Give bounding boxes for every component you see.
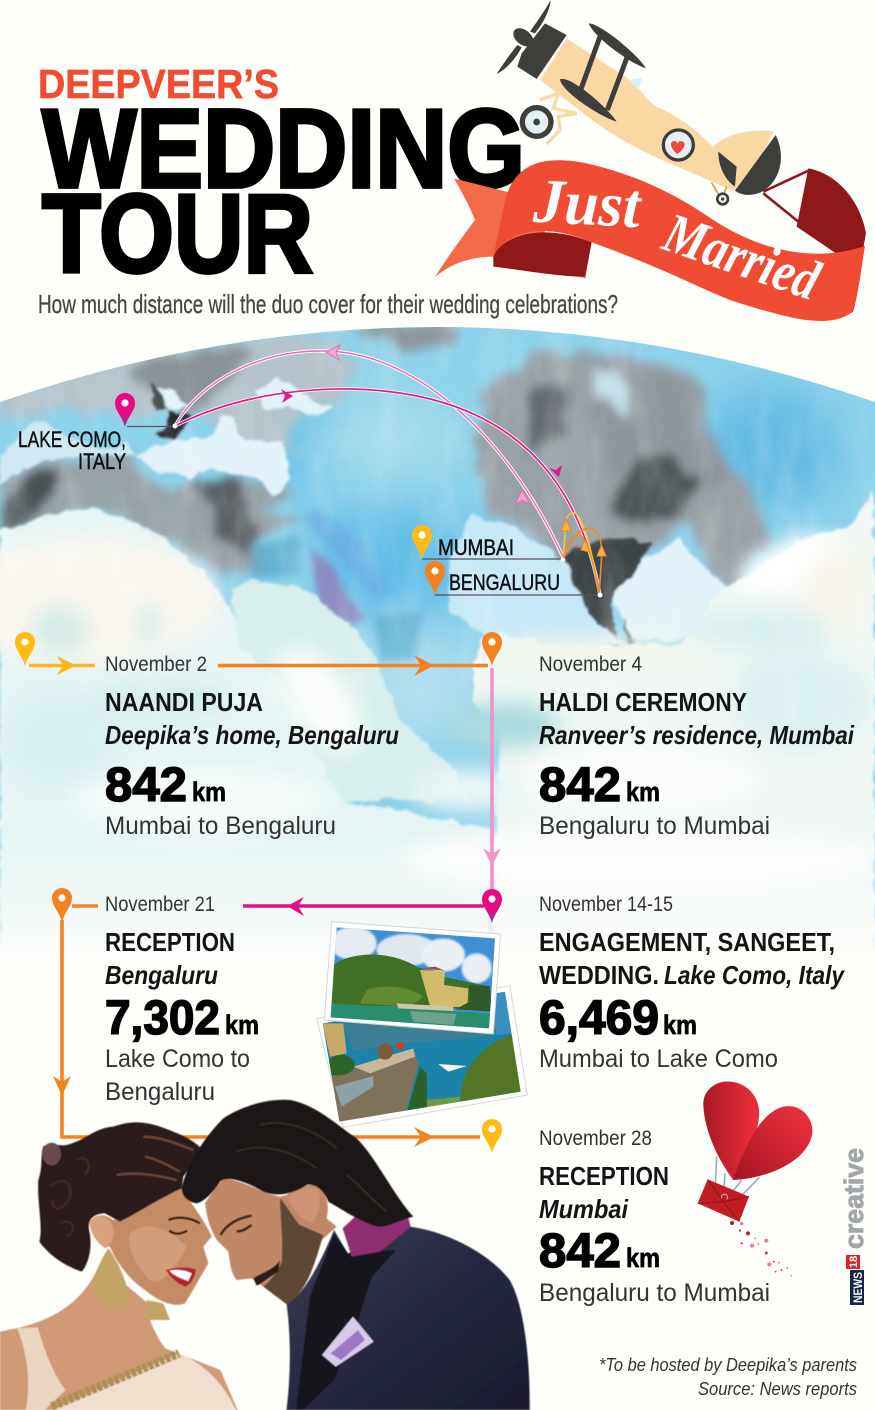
panel: Nov 28 Reception Mumbai: RECEPTION <box>539 1161 669 1191</box>
panel: Nov 28 Reception Mumbai: km <box>626 1243 660 1273</box>
dots <box>172 424 178 428</box>
photos: Lake Como <box>310 922 530 1127</box>
news box <box>850 1270 864 1305</box>
ear <box>287 1188 320 1223</box>
news text: NEWS <box>851 1272 865 1303</box>
panel: Nov 4 Haldi Ceremony <box>539 653 855 840</box>
panel: Nov 2 Naandi Puja <box>105 653 399 840</box>
illustration: biplane with Just Married banner <box>435 0 866 321</box>
panel: Nov 21 Reception Bengaluru: RECEPTION <box>105 927 235 957</box>
hair highlights <box>117 1137 193 1180</box>
panel: Nov 2 Naandi Puja: NAANDI PUJA <box>105 687 263 717</box>
18 text: 18 <box>848 1256 860 1268</box>
moustache <box>253 1260 280 1286</box>
photo: couple <box>0 1100 530 1410</box>
panel: Nov 21 Reception Bengaluru: Bengaluru <box>105 1078 215 1106</box>
pale interior patch <box>593 370 630 417</box>
creative wordmark: creative <box>839 1148 869 1249</box>
biplane <box>497 0 781 204</box>
panel: Nov 14-15 Engagement: Mumbai to Lake Como <box>539 1045 778 1073</box>
eye and brow <box>221 1216 252 1235</box>
heading: Tour: TOUR <box>42 172 313 296</box>
pin: Bengaluru <box>425 561 445 595</box>
left band dark <box>20 468 62 515</box>
panel: Nov 21 Reception Bengaluru: November 21 <box>105 893 215 916</box>
panel: Nov 14-15 Engagement <box>539 893 845 1073</box>
balloon <box>703 1081 812 1180</box>
title <box>38 61 525 296</box>
left band <box>0 450 295 577</box>
panel: Nov 2 Naandi Puja: November 2 <box>105 653 207 676</box>
arrows <box>53 655 501 1147</box>
Atlantic edge <box>0 420 137 487</box>
hair curls <box>50 1158 89 1237</box>
segment: to Nov 4 <box>218 664 488 667</box>
lips <box>166 1267 196 1287</box>
18 badge <box>846 1255 860 1269</box>
panel: Nov 14-15 Engagement: ENGAGEMENT, SANGEET, <box>539 927 835 957</box>
lower photo <box>310 983 530 1127</box>
pin start <box>15 632 35 666</box>
hair highlights <box>237 1123 387 1212</box>
panel: Nov 14-15 Engagement: 6,469 <box>539 992 659 1045</box>
skin <box>0 1263 238 1410</box>
ribbon fold <box>493 232 592 277</box>
pale seas <box>0 378 743 650</box>
panel: Nov 2 Naandi Puja: km <box>192 777 226 807</box>
illustration: heart balloon and envelope <box>698 1081 812 1276</box>
segment: to Nov 14 <box>490 668 494 890</box>
pin Nov 14 <box>482 889 502 923</box>
beard <box>263 1198 323 1304</box>
footnote line 1: *To be hosted by Deepika’s parents <box>599 1355 857 1375</box>
Arabian Sea <box>450 515 623 650</box>
panel: Nov 2 Naandi Puja: 842 <box>105 759 187 812</box>
man: suit <box>287 1227 530 1410</box>
panel: Nov 21 Reception Bengaluru: km <box>225 1010 259 1040</box>
hair <box>182 1100 413 1227</box>
panel: Nov 4 Haldi Ceremony: November 4 <box>539 653 642 676</box>
heading: Wedding: WEDDING <box>42 87 525 211</box>
hair clip <box>42 1143 61 1165</box>
cheek light <box>129 1226 187 1281</box>
routes: Mumbai to Bengaluru <box>561 513 606 594</box>
panel: Nov 14-15 Engagement: Lake Como, Italy <box>664 960 845 990</box>
ribbon <box>493 160 865 321</box>
watercolour world map <box>0 320 875 960</box>
strings <box>715 1157 759 1194</box>
trim <box>52 1353 179 1407</box>
ear <box>89 1216 113 1248</box>
banner tow ropes and dark end <box>763 168 866 258</box>
Bay of Bengal <box>613 537 743 640</box>
watercolour streaks <box>0 327 874 682</box>
route: Mumbai to Lake Como <box>175 345 563 557</box>
route: Lake Como to Bengaluru <box>175 389 600 595</box>
woman: head <box>38 1122 212 1320</box>
panel: Nov 4 Haldi Ceremony: HALDI CEREMONY <box>539 687 747 717</box>
panel: Nov 14-15 Engagement: November 14-15 <box>539 893 673 916</box>
ocean base <box>0 320 875 960</box>
panel: Nov 4 Haldi Ceremony: km <box>626 777 660 807</box>
face <box>89 1188 212 1305</box>
subtitle: How much distance will the duo cover for their wedding celebrations? <box>38 289 618 319</box>
timeline route lines <box>29 655 501 1147</box>
label: Bengaluru: BENGALURU <box>449 570 560 595</box>
panel: Nov 21 Reception Bengaluru: 7,302 <box>105 992 220 1045</box>
label: Lake Como, Italy: ITALY <box>78 449 126 474</box>
pin: Mumbai <box>412 525 432 559</box>
panel: Nov 21 Reception Bengaluru: Lake Como to <box>105 1045 250 1073</box>
pin: Lake Como <box>115 393 135 427</box>
panel: Nov 28 Reception Mumbai <box>539 1127 770 1307</box>
segment: stub after Nov 21 pin <box>72 904 98 908</box>
map labels and routes <box>18 345 606 598</box>
dark Himalaya <box>608 455 700 525</box>
upper Europe <box>0 335 360 455</box>
banner text: Married: Married <box>655 202 829 313</box>
eye and brow <box>168 1218 200 1234</box>
label: Lake Como, Italy: LAKE COMO, <box>18 427 126 452</box>
panel: Nov 2 Naandi Puja: Mumbai to Bengaluru <box>105 812 336 840</box>
label: Mumbai: MUMBAI <box>438 535 514 560</box>
pin Nov 4 <box>482 632 502 666</box>
panel: Nov 4 Haldi Ceremony: Bengaluru to Mumbai <box>539 812 770 840</box>
panel: Nov 28 Reception Mumbai: 842 <box>539 1225 621 1278</box>
panel: Nov 21 Reception Bengaluru <box>105 893 259 1106</box>
logo: News18 Creative <box>839 1148 869 1305</box>
blouse <box>17 1327 65 1410</box>
pin Nov 21 <box>52 888 72 922</box>
hair <box>38 1122 202 1272</box>
label: Lake Como, Italy <box>18 427 126 474</box>
teeth <box>169 1270 192 1281</box>
footnote <box>599 1355 857 1399</box>
face <box>205 1178 337 1304</box>
woman: body <box>0 1263 238 1410</box>
segment: start <box>29 664 95 667</box>
panel: Nov 14-15 Engagement: km <box>663 1010 697 1040</box>
earrings <box>95 1248 170 1320</box>
source line: Source: News reports <box>698 1379 857 1399</box>
lace <box>52 1353 236 1410</box>
panel: Nov 28 Reception Mumbai: Bengaluru to Mumbai <box>539 1279 770 1307</box>
banner text: Just: Just <box>531 166 644 241</box>
timeline pins <box>15 632 502 1153</box>
panel: Nov 28 Reception Mumbai: Mumbai <box>539 1194 629 1224</box>
India and Italy dark land <box>150 385 653 645</box>
falling hearts <box>730 1221 792 1276</box>
collar <box>343 1217 411 1257</box>
middle east to central Asia <box>476 350 767 597</box>
ribbon tail <box>435 178 587 278</box>
panel: Nov 2 Naandi Puja: Deepika’s home, Bengaluru <box>105 720 399 750</box>
kicker: Deepveer's: DEEPVEER’S <box>38 61 279 107</box>
pin Nov 28 <box>482 1119 502 1153</box>
panel: Nov 28 Reception Mumbai: November 28 <box>539 1127 652 1150</box>
dot Mumbai <box>560 558 566 562</box>
dot Bengaluru <box>598 592 602 598</box>
segment: to Nov 28 <box>62 920 480 1137</box>
leader lines <box>127 426 598 595</box>
clouds <box>0 490 875 960</box>
envelope <box>698 1179 749 1222</box>
grey land masses <box>0 322 767 597</box>
panel: Nov 14-15 Engagement: WEDDING. <box>539 960 659 990</box>
segment: to Nov 21 <box>243 904 484 908</box>
panel: Nov 21 Reception Bengaluru: Bengaluru <box>105 960 218 990</box>
upper photo <box>324 922 501 1034</box>
man: head <box>182 1100 413 1304</box>
purple wash and deep-water patch <box>250 510 423 660</box>
panel: Nov 4 Haldi Ceremony: 842 <box>539 759 621 812</box>
